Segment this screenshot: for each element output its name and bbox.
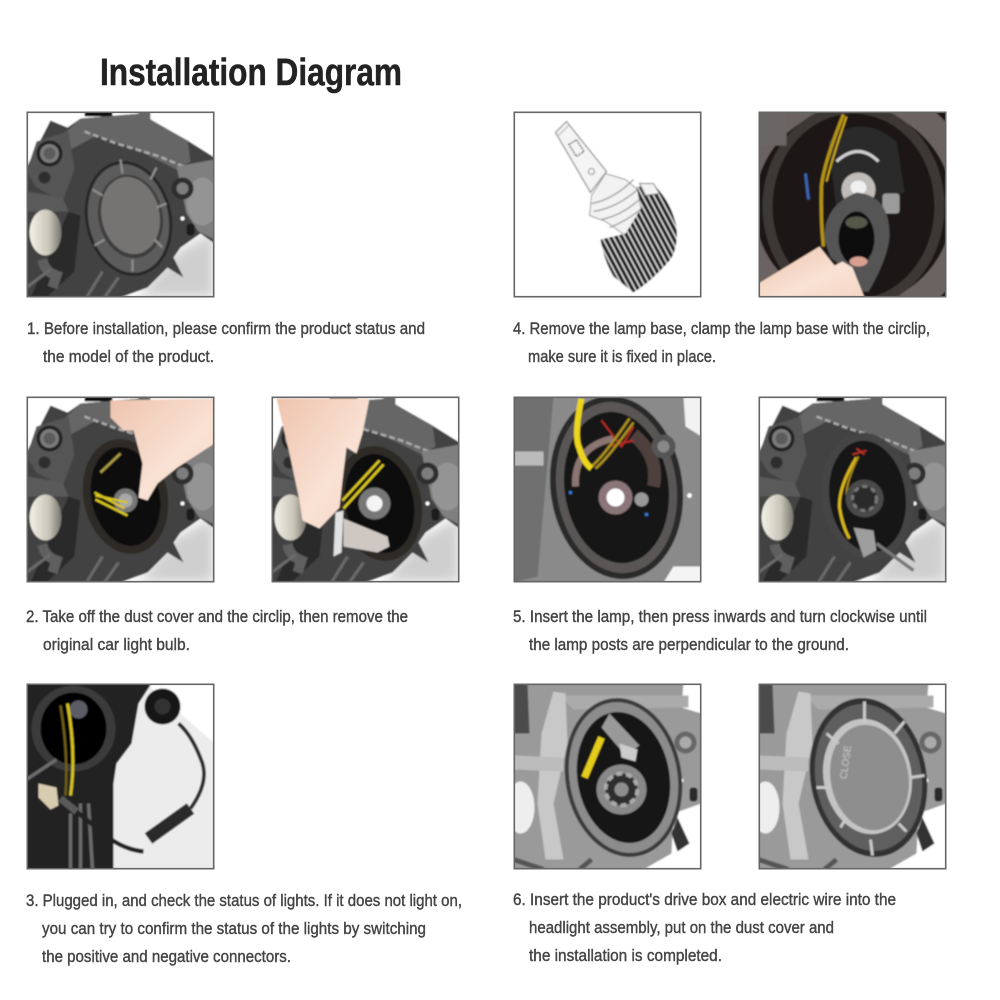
photo: removing original bulb (step 2) bbox=[272, 396, 464, 582]
text: step 1: the model of the product. bbox=[43, 347, 214, 366]
photo: inserting drive box (step 6) bbox=[506, 684, 702, 870]
title: Installation Diagram bbox=[100, 52, 402, 94]
text: step 3: the positive and negative connectors. bbox=[42, 947, 291, 966]
photo: lamp inserted and turned (step 5) bbox=[758, 396, 950, 582]
text: step 6: 6. Insert the product's drive box and electric wire into the bbox=[513, 890, 896, 909]
text: step 2: original car light bulb. bbox=[43, 635, 190, 654]
text: step 5: 5. Insert the lamp, then press inwards and turn clockwise until bbox=[513, 607, 927, 626]
photo: dust cover refitted (step 6): CLOSE bbox=[839, 744, 854, 780]
text: step 4: 4. Remove the lamp base, clamp the lamp base with the circlip, bbox=[513, 319, 930, 338]
text: step 3 bbox=[26, 891, 462, 966]
photo: dust cover refitted (step 6) bbox=[752, 684, 946, 870]
text: step 4 bbox=[513, 319, 930, 366]
photo: socket close-up with wires (step 5) bbox=[514, 387, 702, 588]
text: step 6 bbox=[513, 890, 896, 965]
illustration: LED bulb line drawing (step 4) bbox=[514, 112, 702, 298]
text: step 6: headlight assembly, put on the dust cover and bbox=[529, 918, 834, 937]
text: step 3: you can try to confirm the status of the lights by switching bbox=[42, 919, 426, 938]
text: step 1: 1. Before installation, please confirm the product status and bbox=[27, 319, 425, 338]
photo: lamp base with circlip (step 4) bbox=[758, 112, 946, 298]
text: step 5 bbox=[513, 607, 927, 654]
photo: headlight with dust cover (step 1) bbox=[26, 112, 218, 298]
text: step 4: make sure it is fixed in place. bbox=[528, 347, 716, 366]
text: step 5: the lamp posts are perpendicular to the ground. bbox=[529, 635, 849, 654]
photo: removing dust cover and circlip (step 2) bbox=[26, 396, 218, 582]
text: step 1 bbox=[27, 319, 425, 366]
photo: plugged-in connector and cable (step 3) bbox=[26, 684, 214, 870]
text: step 6: the installation is completed. bbox=[529, 946, 722, 965]
text: step 3: 3. Plugged in, and check the status of lights. If it does not light on, bbox=[26, 891, 462, 910]
text: step 2 bbox=[26, 607, 408, 654]
text: step 2: 2. Take off the dust cover and the circlip, then remove the bbox=[26, 607, 408, 626]
